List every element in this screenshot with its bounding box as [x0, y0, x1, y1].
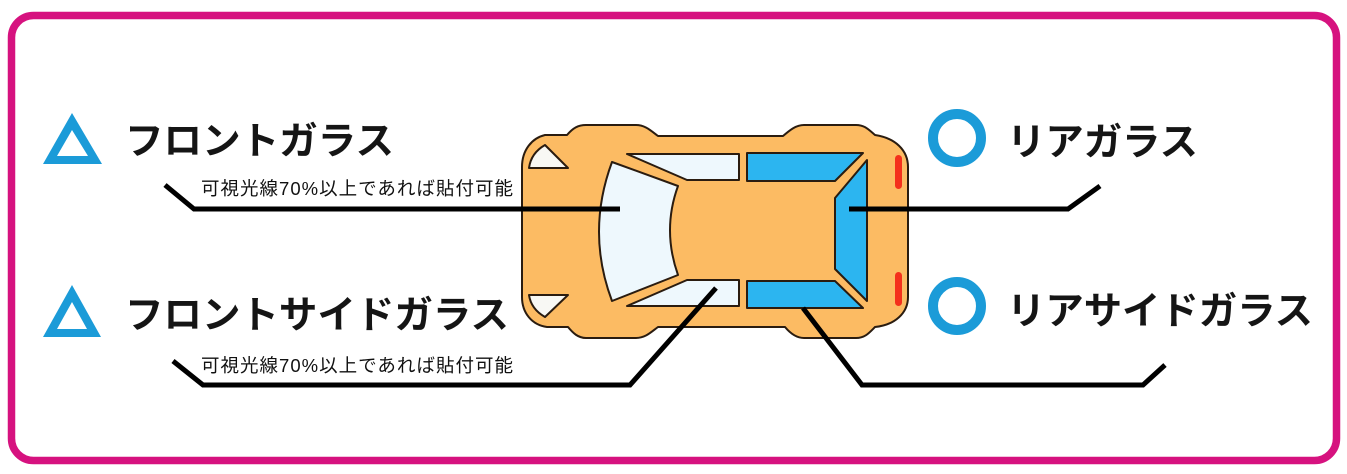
car illustration: [522, 125, 908, 338]
heading: rear side glass: リアサイドガラス: [1007, 291, 1313, 333]
heading: front glass: フロントガラス: [125, 121, 394, 163]
text: front glass note: 可視光線70%以上であれば貼付可能: [201, 178, 513, 199]
icon: triangle front side glass: [43, 285, 101, 337]
leader line: rear side glass: [803, 308, 1165, 385]
icon: circle rear glass: [933, 114, 981, 162]
heading: front side glass: フロントサイドガラス: [125, 295, 509, 337]
tail light top: [895, 155, 902, 189]
icon: triangle front glass: [43, 113, 102, 164]
rear side window bottom: [747, 281, 863, 308]
leader line: front glass: [165, 185, 620, 209]
rear window: [835, 160, 867, 301]
front side window top: [627, 154, 739, 180]
front side window bottom: [627, 280, 739, 306]
leader line: front side glass: [173, 288, 716, 385]
windshield: [599, 162, 678, 301]
headlight bottom: [529, 295, 568, 317]
text: front side glass note: 可視光線70%以上であれば貼付可能: [201, 355, 513, 376]
headlight top: [529, 145, 568, 168]
tail light bottom: [895, 272, 902, 306]
car body: [522, 125, 908, 338]
icon: circle rear side glass: [933, 282, 981, 330]
leader line: rear glass: [849, 186, 1100, 209]
rear side window top: [747, 153, 863, 181]
heading: rear glass: リアガラス: [1007, 122, 1198, 164]
